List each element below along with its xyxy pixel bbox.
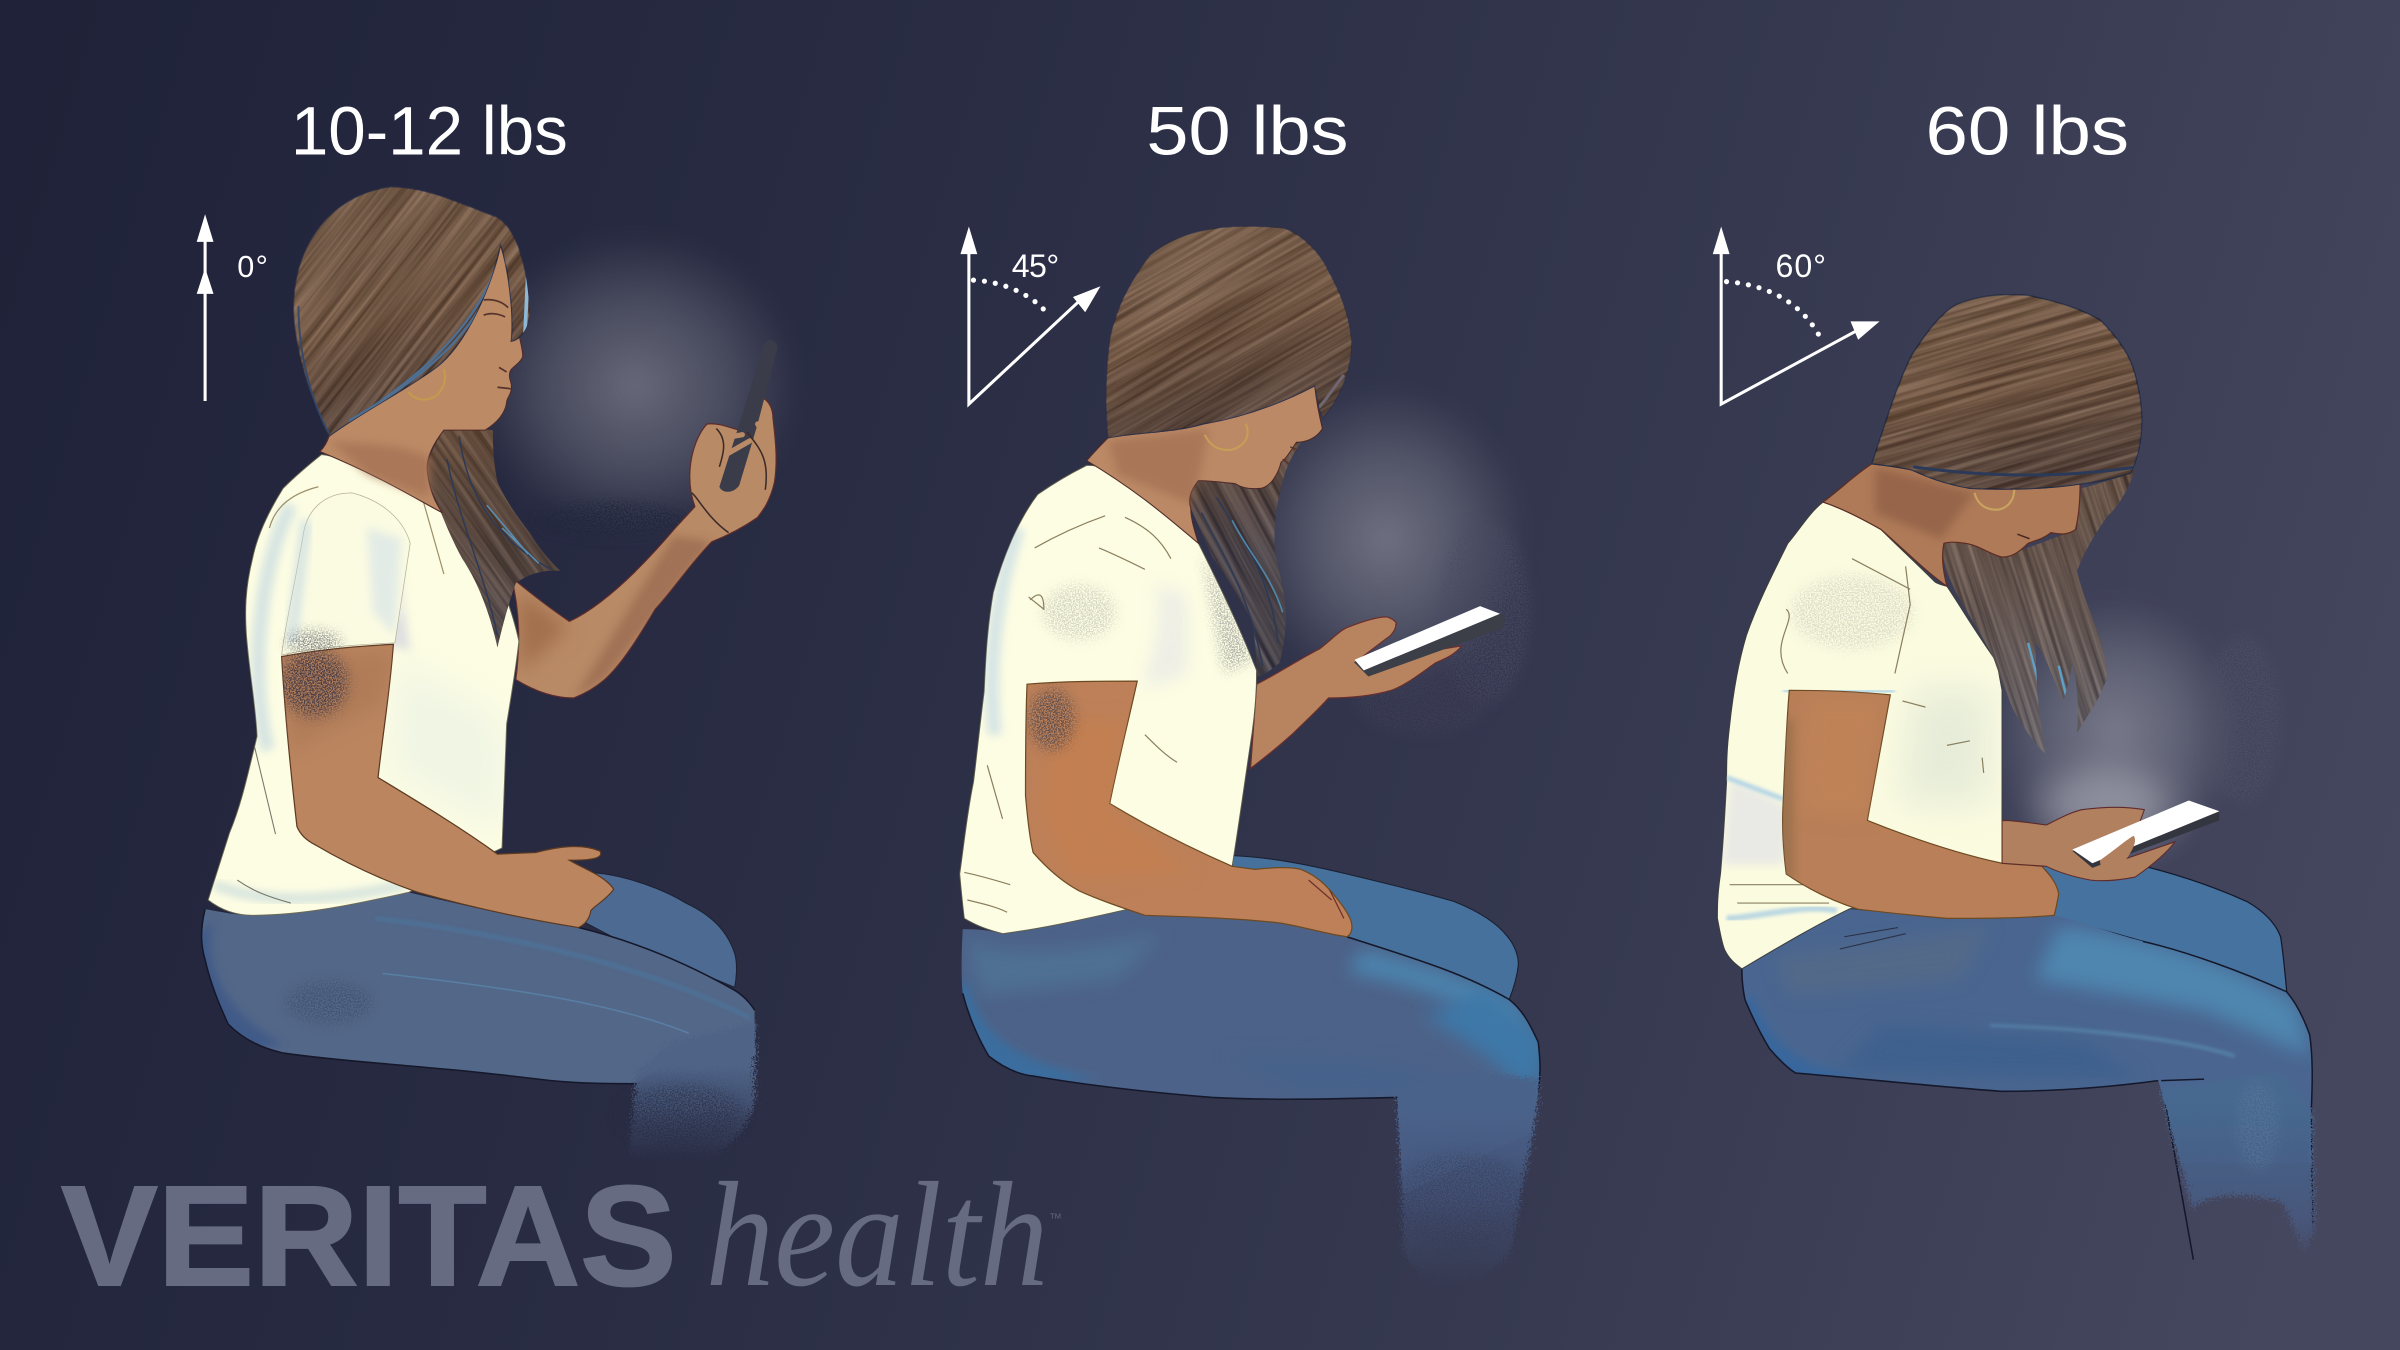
leg grain	[617, 1084, 745, 1145]
lower leg fading out	[629, 1022, 755, 1164]
lower leg fading out	[1397, 1071, 1538, 1286]
lower hair	[1943, 470, 2135, 754]
smudge beside phone	[1439, 520, 1531, 704]
fingers over phone	[692, 424, 770, 533]
jeans, near leg	[1730, 909, 2313, 1260]
figure 2: 45 degree neck bend, phone at chest height	[959, 226, 1544, 1268]
thumb over phone	[2100, 836, 2135, 872]
phone glow	[470, 233, 801, 539]
holding hand and forearm	[2002, 807, 2175, 881]
phone	[1355, 606, 1505, 677]
t-shirt	[1717, 502, 2002, 969]
earring	[1974, 490, 2014, 510]
phone	[2072, 801, 2219, 868]
upper arm and lowered hand	[1026, 681, 1352, 937]
upper arm and lowered hand	[280, 644, 614, 928]
heading: 10-12 lbs: 10-12 lbs	[291, 93, 568, 170]
leg grain	[1393, 1153, 1531, 1251]
smudge below phone	[1355, 658, 1492, 735]
earring	[409, 369, 445, 400]
phone, dark back	[719, 340, 778, 492]
jeans, near leg	[949, 909, 1546, 1194]
upper arm and lowered fist	[1776, 690, 2059, 918]
raised arm and hand	[511, 398, 776, 698]
glow shadow speckle	[536, 502, 689, 539]
angle diagram: 0 degrees: 0°	[237, 250, 268, 284]
jeans, far leg	[490, 868, 736, 987]
angle diagram: 45 degrees: 45°	[1012, 248, 1059, 284]
logo: Veritas Health: health	[706, 1152, 1048, 1318]
neck and face	[1087, 386, 1322, 543]
phone glow	[1990, 597, 2241, 866]
lower leg	[2161, 1071, 2314, 1252]
forearm and holding hand	[1251, 617, 1462, 768]
lower hair	[428, 430, 560, 648]
logo: Veritas Health: VERITAS	[61, 1157, 677, 1316]
angle diagram: 60 degrees	[1713, 227, 1880, 404]
t-shirt	[208, 455, 519, 915]
top hair	[1871, 294, 2142, 490]
angle diagram: 0 degrees	[197, 214, 268, 401]
top hair	[1106, 226, 1352, 438]
smudge beside phone	[2204, 635, 2281, 804]
jeans, far leg	[2036, 861, 2287, 992]
lighter scuffed area on lower leg	[2236, 1079, 2279, 1171]
heading: 50 lbs: 50 lbs	[1146, 93, 1348, 170]
neck and face	[320, 245, 523, 513]
earring	[1205, 424, 1248, 450]
lower hair	[1190, 442, 1301, 676]
phone glow	[1244, 386, 1526, 692]
jeans, far leg	[1232, 856, 1518, 999]
t-shirt	[960, 465, 1257, 934]
figure 3: 60 degree neck bend, phone at lap height	[1717, 294, 2320, 1260]
top hair	[293, 186, 530, 437]
figure 1: upright posture, phone at eye level	[201, 186, 781, 1154]
angle diagram: 60 degrees: 60°	[1776, 248, 1826, 284]
bright glow over screen	[2036, 771, 2173, 845]
logo: Veritas Health	[61, 1152, 1061, 1318]
logo: Veritas Health: TM	[1050, 1211, 1061, 1220]
jeans, near leg	[184, 892, 755, 1084]
heading: 60 lbs: 60 lbs	[1926, 93, 2129, 170]
neck and face	[1823, 464, 2080, 586]
angle diagram: 45 degrees	[960, 227, 1101, 404]
